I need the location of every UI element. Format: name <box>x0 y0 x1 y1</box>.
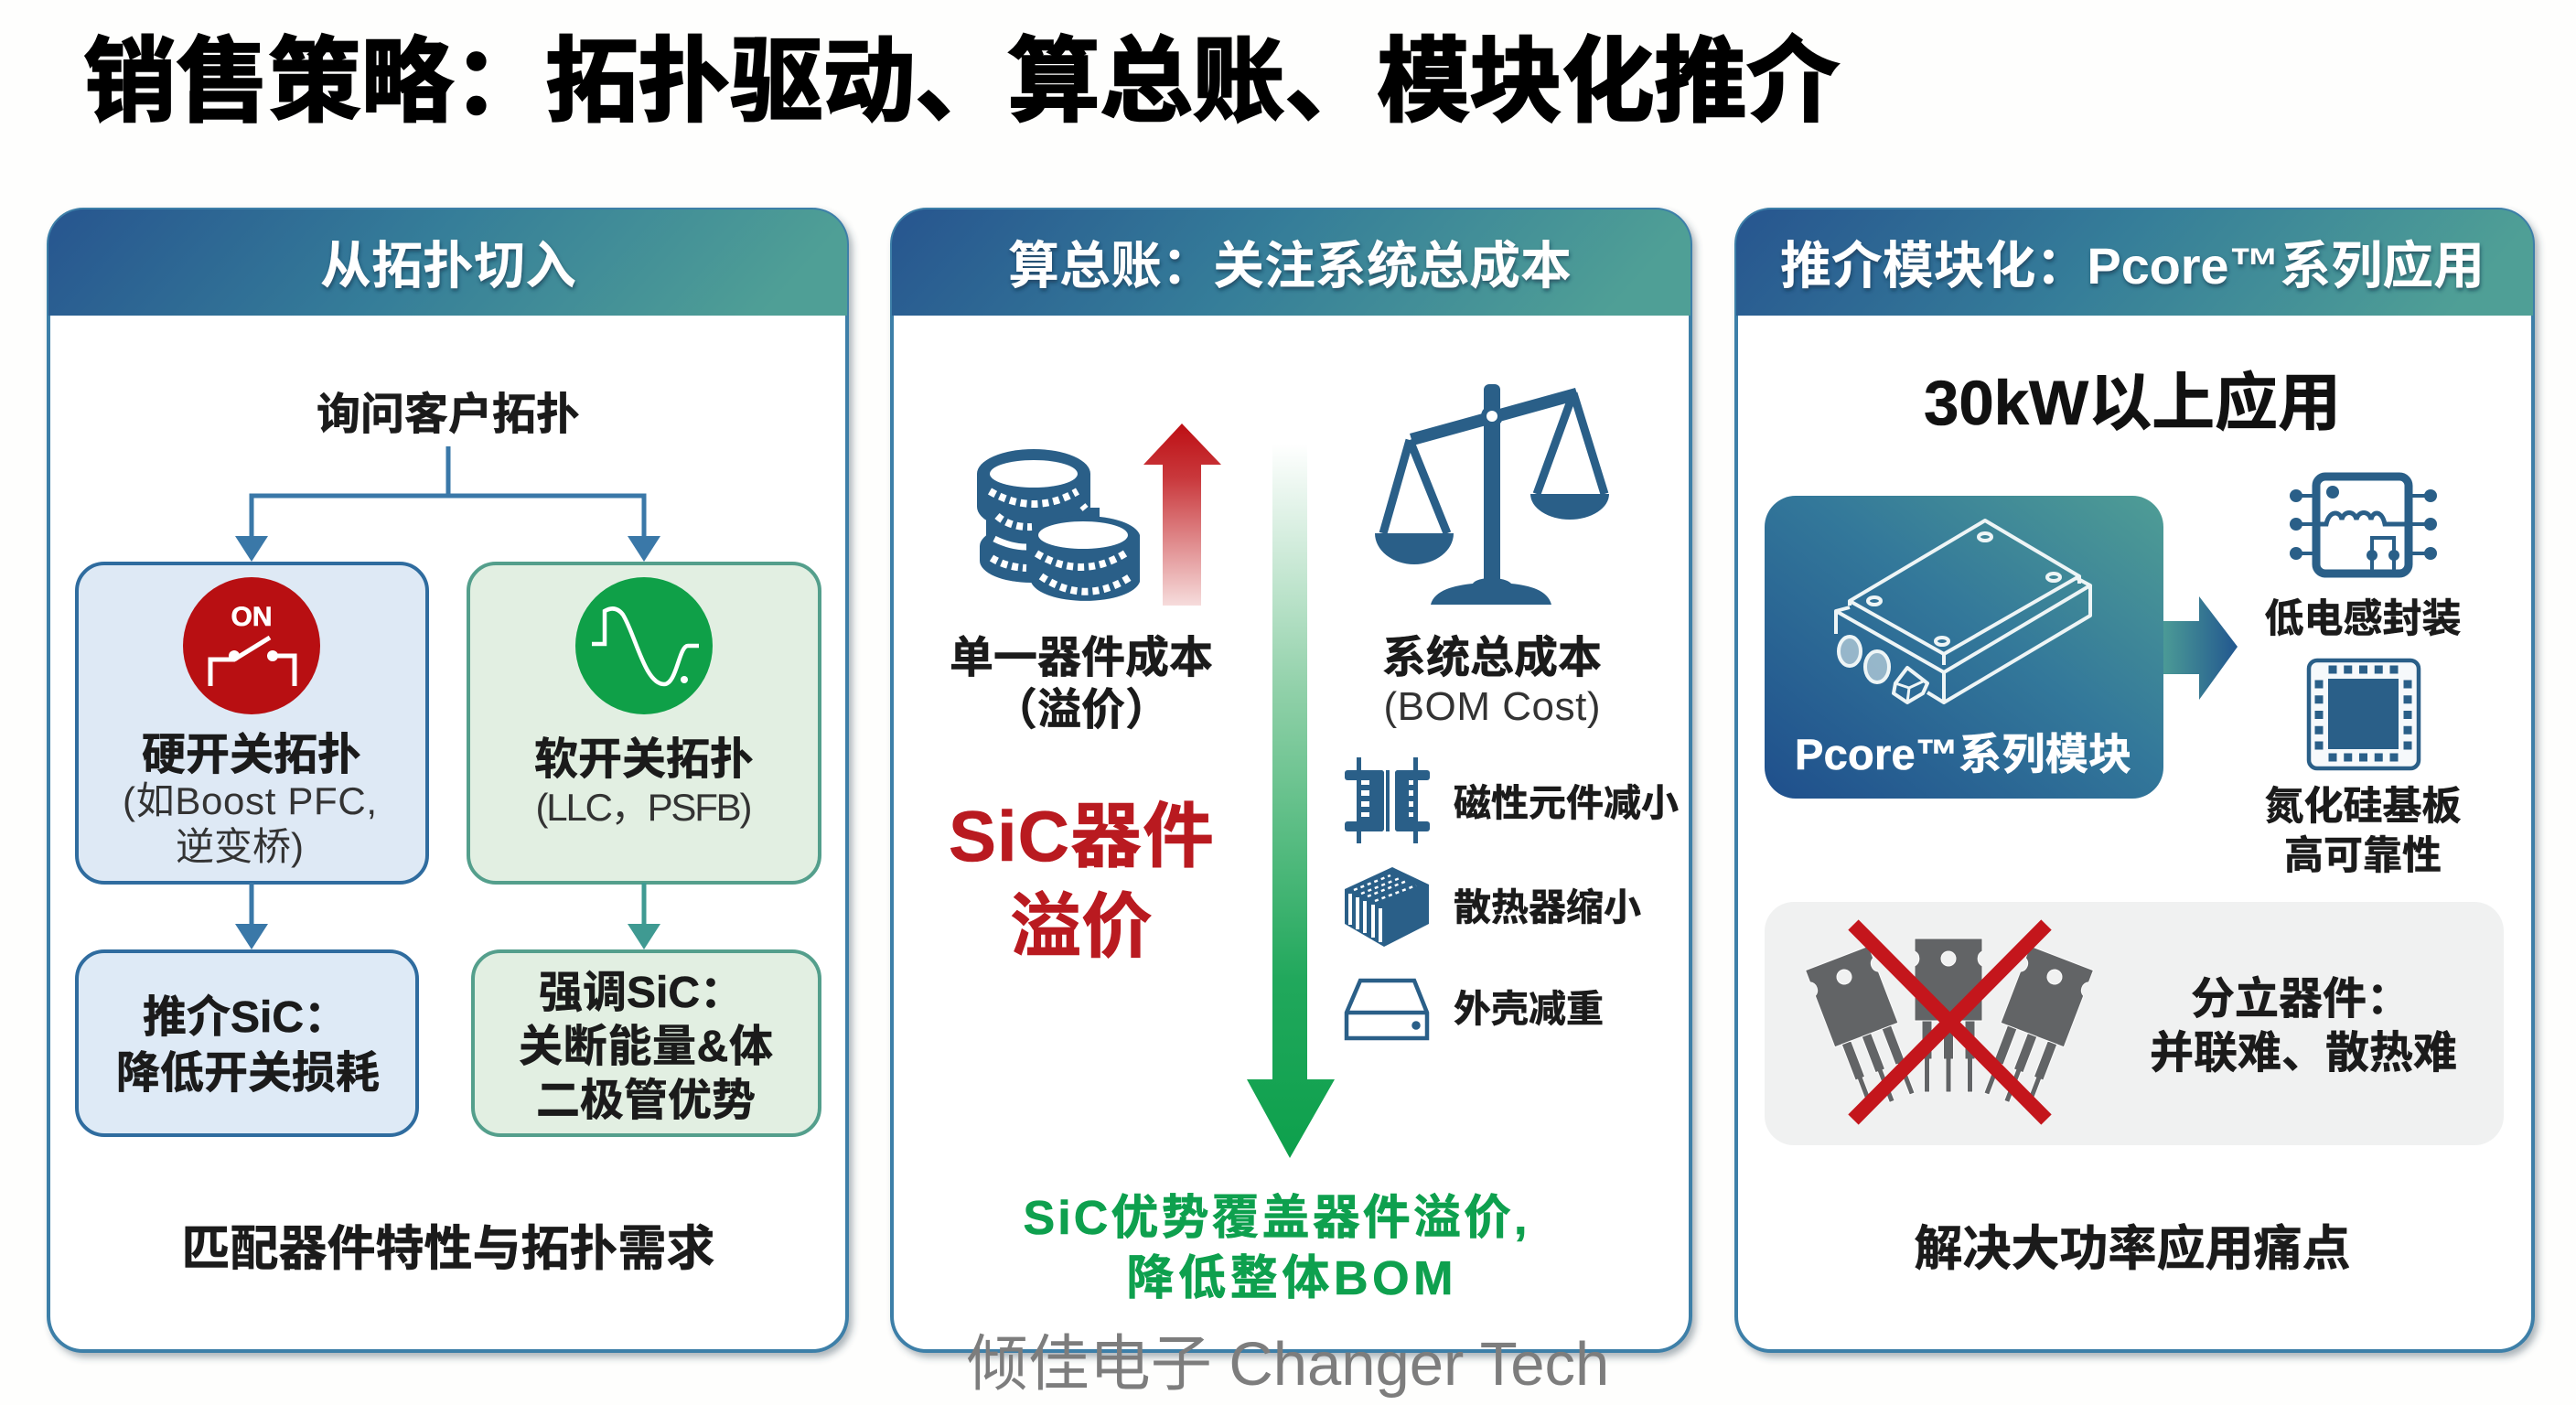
card: recommend SiC: 降低开关损耗 <box>116 1049 380 1098</box>
icon: power module <box>1836 520 2090 702</box>
icon: low inductance package <box>2290 477 2437 574</box>
text: substrate reliability <box>2265 785 2461 878</box>
arrow: hard to recommendation <box>235 883 268 949</box>
icon: balance scale <box>1375 384 1609 605</box>
panel: total cost <box>892 209 1690 1351</box>
arrow: green down <box>1247 444 1335 1158</box>
text: substrate reliability: 氮化硅基板 <box>2265 785 2461 829</box>
title: 销售策略：拓扑驱动、算总账、模块化推介 <box>83 31 1840 134</box>
icon: ON switch: ON <box>231 602 273 632</box>
panel frame <box>48 209 847 1351</box>
text: discrete pain points <box>2150 975 2457 1078</box>
panel: topology entry <box>48 209 847 1351</box>
arrow: module to features <box>2163 596 2238 700</box>
text: system total cost <box>1382 634 1602 729</box>
heading: from topology: 从拓扑切入 <box>320 237 576 295</box>
watermark: 倾佳电子 Changer Tech <box>967 1330 1609 1399</box>
text: match conclusion: 匹配器件特性与拓扑需求 <box>181 1222 715 1276</box>
text: substrate reliability: 高可靠性 <box>2284 834 2442 878</box>
card: soft switching <box>468 563 820 883</box>
icon: three crossed transistors <box>1806 925 2093 1120</box>
icon: soft wave <box>575 577 713 714</box>
icon: heatsink <box>1345 867 1429 947</box>
label: hard switching: 硬开关拓扑 <box>142 731 361 779</box>
panel: module recommendation <box>1736 209 2533 1351</box>
text: single device cost: 单一器件成本 <box>950 634 1213 682</box>
text: Pcore module: Pcore™系列模块 <box>1795 730 2131 778</box>
text: SiC conclusion: 降低整体BOM <box>1127 1252 1453 1305</box>
text: SiC premium: SiC器件 <box>949 796 1214 876</box>
text: above 30kW: 30kW以上应用 <box>1924 368 2341 438</box>
card: hard switching <box>77 563 427 883</box>
text: enclosure lighter: 外壳减重 <box>1454 988 1604 1030</box>
label: hard switching: (如Boost PFC, <box>123 779 377 822</box>
text: low inductance: 低电感封装 <box>2265 597 2461 641</box>
arrow: branch to two topologies <box>235 446 660 562</box>
icon: silicon nitride substrate <box>2309 660 2419 768</box>
heading: total cost: 算总账：关注系统总成本 <box>1008 237 1572 295</box>
text: system total cost: 系统总成本 <box>1382 634 1602 682</box>
text: single device cost: （溢价） <box>993 686 1169 735</box>
text: solving pain points: 解决大功率应用痛点 <box>1914 1222 2351 1276</box>
text: magnetics smaller: 磁性元件减小 <box>1454 782 1679 824</box>
text: SiC premium: 溢价 <box>1010 886 1153 967</box>
icon: enclosure <box>1347 981 1427 1038</box>
arrow: red up <box>1143 424 1221 606</box>
panel frame <box>892 209 1690 1351</box>
label: soft switching: (LLC，PSFB) <box>536 786 752 829</box>
panel: discrete devices <box>1765 902 2504 1145</box>
text: discrete pain points: 并联难、散热难 <box>2150 1029 2457 1078</box>
card: recommend SiC <box>77 951 417 1135</box>
text: system total cost: (BOM Cost) <box>1383 684 1601 729</box>
icon: magnetics <box>1345 757 1430 843</box>
label: soft switching <box>534 735 754 829</box>
label: hard switching <box>123 731 377 868</box>
card: emphasize SiC: 二极管优势 <box>536 1077 756 1125</box>
text: SiC conclusion <box>1023 1192 1528 1305</box>
arrow: soft to recommendation <box>628 883 660 949</box>
card: emphasize SiC: 强调SiC： <box>539 969 744 1017</box>
label: soft switching: 软开关拓扑 <box>534 735 754 784</box>
icon: ON switch <box>183 577 320 714</box>
module card <box>1765 496 2163 799</box>
text: SiC conclusion: SiC优势覆盖器件溢价, <box>1023 1192 1528 1245</box>
heading: Pcore series: 推介模块化：Pcore™系列应用 <box>1780 237 2485 295</box>
text: heatsink smaller: 散热器缩小 <box>1454 886 1641 928</box>
panel frame <box>1736 209 2533 1351</box>
card: emphasize SiC: 关断能量&体 <box>519 1023 773 1071</box>
text: SiC premium <box>949 796 1214 967</box>
icon: coins <box>977 449 1140 601</box>
text: single device cost <box>950 634 1213 735</box>
card: recommend SiC: 推介SiC： <box>143 993 348 1042</box>
card: emphasize SiC <box>473 951 820 1135</box>
label: hard switching: 逆变桥) <box>176 825 304 868</box>
text: discrete pain points: 分立器件： <box>2191 975 2410 1024</box>
text: ask customer topology: 询问客户拓扑 <box>317 391 580 439</box>
